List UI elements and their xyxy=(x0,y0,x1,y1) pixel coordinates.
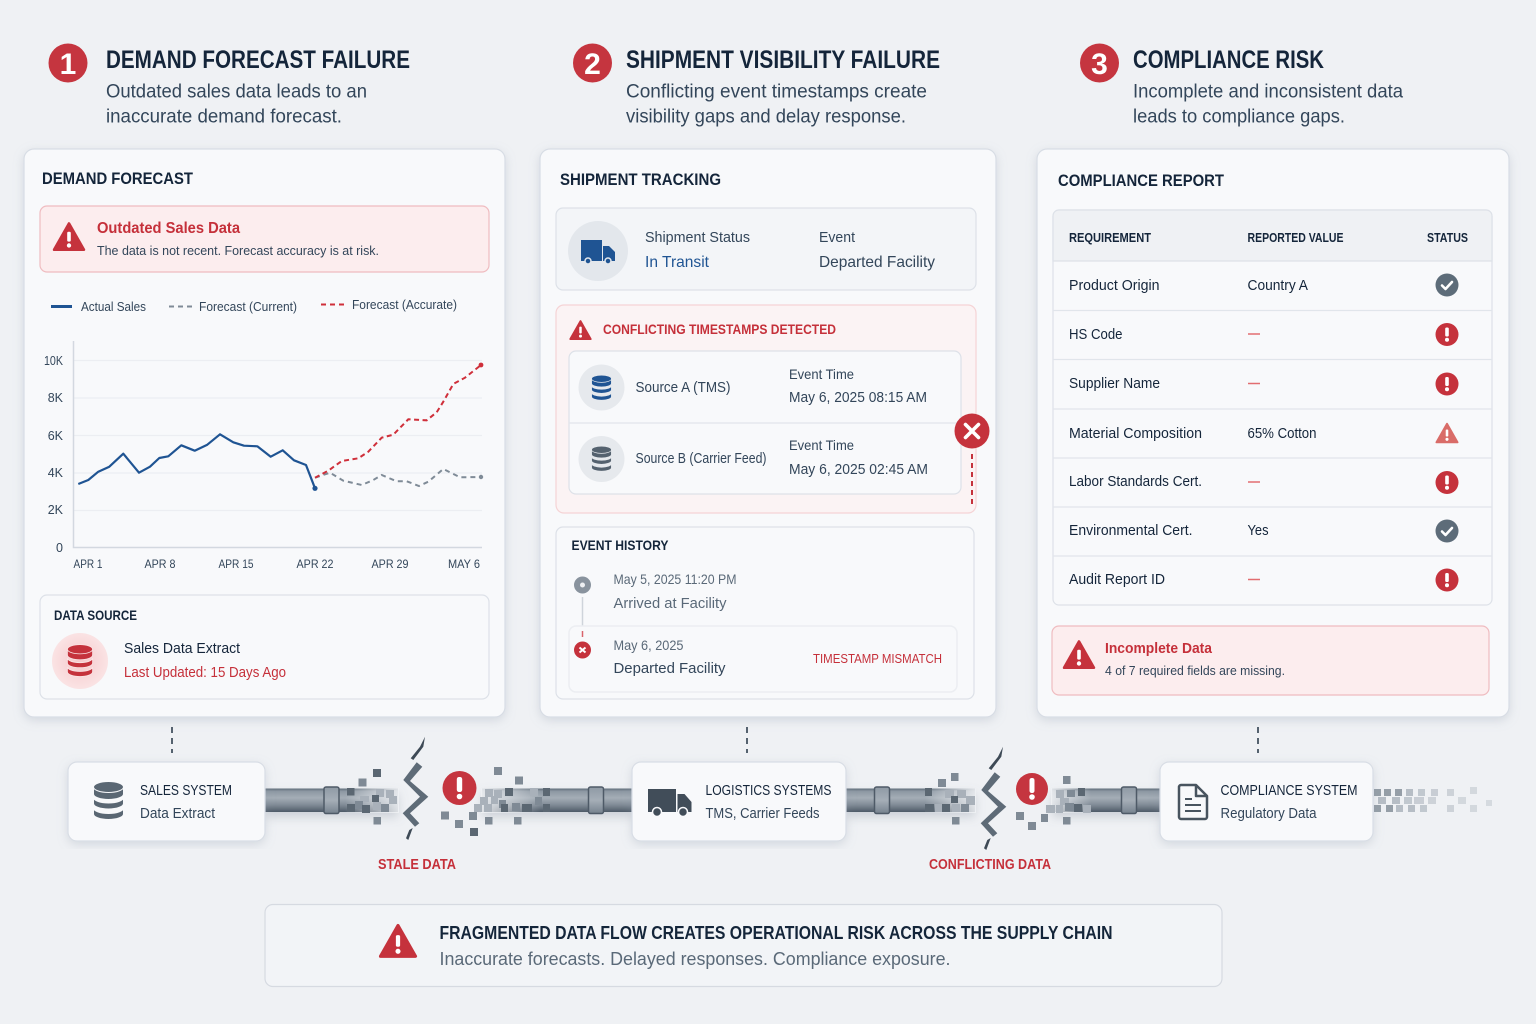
data source box: DATA SOURCE xyxy=(54,607,137,623)
icon: number 3 badge xyxy=(1080,44,1119,82)
row: audit report id xyxy=(1069,568,1458,592)
event history box: EVENT HISTORY xyxy=(572,537,669,553)
icon: document xyxy=(1179,785,1207,819)
icon: conflict x with dashed connector xyxy=(954,414,990,506)
data source box: Sales Data Extract xyxy=(124,640,241,657)
shipment status box: Event xyxy=(819,229,856,246)
line chart: MAY 6 xyxy=(448,557,480,571)
subtitle: shipment visibility failure: Conflicting event timestamps create xyxy=(626,80,927,102)
icon: alert two xyxy=(1016,773,1048,805)
callout: outdated sales data xyxy=(40,206,489,272)
callout: conflicting timestamps xyxy=(556,305,990,513)
source comparison table: Source B (Carrier Feed) xyxy=(636,451,766,467)
system node: compliance system: Regulatory Data xyxy=(1220,806,1317,822)
line chart: APR 22 xyxy=(296,557,334,571)
line chart: 10K xyxy=(44,354,64,368)
line chart: APR 15 xyxy=(218,557,254,571)
panel: shipment tracking xyxy=(540,149,996,717)
dashed connectors from panels to systems xyxy=(172,727,1258,753)
panel heading: compliance report: COMPLIANCE REPORT xyxy=(1058,171,1225,190)
row: labor standards cert: Labor Standards Cert. xyxy=(1069,474,1202,490)
row: supplier name: Supplier Name xyxy=(1069,376,1160,392)
system node: sales system: SALES SYSTEM xyxy=(140,783,232,799)
icon: blue database xyxy=(578,364,624,410)
row: product origin: Country A xyxy=(1248,278,1308,294)
row: environmental cert xyxy=(1069,520,1458,542)
line chart xyxy=(44,341,483,571)
row: product origin: Product Origin xyxy=(1069,278,1160,294)
icon: number 2 badge xyxy=(573,44,612,82)
label: stale data: STALE DATA xyxy=(378,857,456,873)
subtitle: compliance risk xyxy=(1133,80,1403,128)
callout: outdated sales data: The data is not recent. Forecast accuracy is at risk. xyxy=(97,243,379,258)
icon: number 3 badge: 3 xyxy=(1091,48,1108,81)
row: environmental cert: Yes xyxy=(1248,523,1268,539)
chart legend: Forecast (Current) xyxy=(199,299,297,314)
icon: warning triangle xyxy=(1064,642,1094,668)
panel heading: demand forecast: DEMAND FORECAST xyxy=(42,169,194,188)
timeline connector xyxy=(582,597,584,634)
title: compliance risk: COMPLIANCE RISK xyxy=(1133,46,1324,74)
row: product origin xyxy=(1069,274,1458,296)
label: conflicting data: CONFLICTING DATA xyxy=(929,857,1051,873)
data fragments: first break right xyxy=(441,767,550,836)
line chart: APR 29 xyxy=(372,557,409,571)
system node: logistics systems: TMS, Carrier Feeds xyxy=(706,806,820,822)
line chart: APR 1 xyxy=(74,557,103,571)
pipe fragments dissolving at the end xyxy=(1374,787,1492,812)
icon: truck xyxy=(648,789,692,816)
row: hs code xyxy=(1069,323,1458,346)
icon: number 1 badge xyxy=(48,44,88,82)
subtitle: shipment visibility failure xyxy=(626,80,927,128)
data source box: Last Updated: 15 Days Ago xyxy=(124,665,286,681)
subtitle: demand forecast failure: inaccurate demand forecast. xyxy=(106,106,342,128)
system node: sales system: Data Extract xyxy=(140,806,215,822)
panel: compliance report xyxy=(1037,149,1509,717)
title: shipment visibility failure: SHIPMENT VISIBILITY FAILURE xyxy=(626,46,940,74)
system node: sales system xyxy=(68,762,265,841)
event history box: Departed Facility xyxy=(614,660,726,677)
table header: STATUS xyxy=(1427,231,1468,245)
line chart: 4K xyxy=(48,466,64,480)
data source box xyxy=(40,595,489,699)
event history box xyxy=(556,527,974,699)
line chart: 0 xyxy=(56,541,63,555)
pipe fading ends xyxy=(345,788,1091,813)
callout: incomplete data xyxy=(1052,626,1489,695)
subtitle: compliance risk: Incomplete and inconsistent data xyxy=(1133,80,1403,102)
row: material composition: Material Composition xyxy=(1069,426,1202,442)
icon: warning triangle xyxy=(570,321,591,339)
source comparison table: Source A (TMS) xyxy=(636,380,730,396)
shipment status box: In Transit xyxy=(645,254,710,271)
line chart: 2K xyxy=(48,503,64,517)
icon: warning triangle xyxy=(54,224,84,250)
icon: warning triangle xyxy=(381,926,415,956)
source comparison table: Event Time xyxy=(789,437,854,453)
data pipeline xyxy=(265,737,1492,873)
system node: compliance system: COMPLIANCE SYSTEM xyxy=(1220,783,1358,799)
row: material composition xyxy=(1069,424,1458,442)
subtitle: demand forecast failure xyxy=(106,80,367,128)
subtitle: compliance risk: leads to compliance gaps. xyxy=(1133,106,1345,128)
table header: REPORTED VALUE xyxy=(1248,231,1344,245)
row: hs code: HS Code xyxy=(1069,327,1122,343)
pipe segments xyxy=(265,788,1162,812)
chart legend: Forecast (Accurate) xyxy=(352,297,457,312)
heading: demand forecast failure xyxy=(48,44,410,128)
event history box: May 5, 2025 11:20 PM xyxy=(614,571,736,587)
event history box: TIMESTAMP MISMATCH xyxy=(813,652,942,666)
row: supplier name xyxy=(1069,372,1458,396)
callout: outdated sales data: Outdated Sales Data xyxy=(97,220,240,237)
line chart: APR 8 xyxy=(144,557,176,571)
icon: number 2 badge: 2 xyxy=(584,48,601,81)
chart legend xyxy=(51,297,457,314)
summary banner xyxy=(265,904,1222,986)
data fragments: first break left xyxy=(347,769,397,824)
summary heading: FRAGMENTED DATA FLOW CREATES OPERATIONAL RISK ACROSS THE SUPPLY CHAIN xyxy=(440,922,1112,943)
subtitle: shipment visibility failure: visibility gaps and delay response. xyxy=(626,106,906,128)
row: environmental cert: Environmental Cert. xyxy=(1069,523,1192,539)
icon: pipe break two xyxy=(981,747,1006,850)
callout: incomplete data: Incomplete Data xyxy=(1105,640,1213,657)
subtitle: demand forecast failure: Outdated sales data leads to an xyxy=(106,80,367,102)
summary text: Inaccurate forecasts. Delayed responses. Compliance exposure. xyxy=(440,948,950,969)
icon: red database xyxy=(52,633,108,689)
icon: alert one xyxy=(442,771,476,805)
icon: timeline red dot xyxy=(574,642,591,658)
source comparison table: May 6, 2025 02:45 AM xyxy=(789,462,928,478)
data fragments: second break left xyxy=(925,773,975,824)
panel heading: shipment tracking: SHIPMENT TRACKING xyxy=(560,170,721,189)
callout: conflicting timestamps: CONFLICTING TIMESTAMPS DETECTED xyxy=(603,321,836,337)
line chart: 6K xyxy=(48,429,64,443)
icon: gray database xyxy=(578,436,624,482)
event history box: May 6, 2025 xyxy=(614,637,684,653)
table header: REQUIREMENT xyxy=(1069,231,1151,245)
shipment status box: Departed Facility xyxy=(819,254,935,271)
compliance table xyxy=(1053,210,1492,605)
line chart: 8K xyxy=(48,391,64,405)
title: demand forecast failure: DEMAND FORECAST FAILURE xyxy=(106,46,410,74)
highlighted event row xyxy=(569,626,957,692)
event history box: Arrived at Facility xyxy=(614,595,727,612)
icon: database xyxy=(94,782,124,820)
source comparison table: Event Time xyxy=(789,366,854,382)
icon: delivery truck xyxy=(568,221,628,281)
shipment status box: Shipment Status xyxy=(645,229,750,246)
row: labor standards cert xyxy=(1069,471,1458,494)
callout: incomplete data: 4 of 7 required fields are missing. xyxy=(1105,663,1285,678)
system node: compliance system xyxy=(1160,762,1373,841)
icon: number 1 badge: 1 xyxy=(60,48,76,81)
shipment status box xyxy=(556,208,976,290)
source comparison table: May 6, 2025 08:15 AM xyxy=(789,390,927,406)
system node: logistics systems xyxy=(632,762,846,841)
pipe couplers xyxy=(324,787,1136,814)
source comparison table xyxy=(569,351,961,494)
panel: demand forecast xyxy=(24,149,505,717)
row: material composition: 65% Cotton xyxy=(1248,426,1316,442)
icon: timeline gray dot xyxy=(574,576,591,594)
table header xyxy=(1069,231,1468,245)
heading: compliance risk xyxy=(1080,44,1403,128)
row: audit report id: Audit Report ID xyxy=(1069,572,1165,588)
icon: pipe break one xyxy=(403,737,428,840)
data fragments: second break right xyxy=(1016,776,1091,830)
heading: shipment visibility failure xyxy=(573,44,940,128)
chart legend: Actual Sales xyxy=(81,299,146,314)
system node: logistics systems: LOGISTICS SYSTEMS xyxy=(706,783,832,799)
